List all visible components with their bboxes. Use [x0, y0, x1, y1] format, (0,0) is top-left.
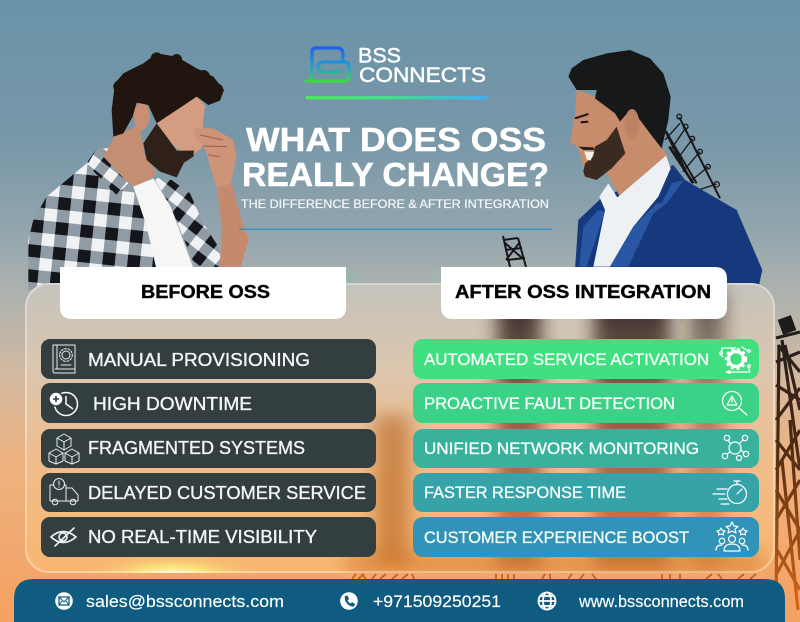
icon: phone — [340, 592, 358, 610]
icon: magnifier with warning — [722, 392, 747, 415]
icon: email — [55, 592, 73, 610]
logo wordmark: BSS — [358, 44, 401, 68]
after row 4: faster response time: FASTER RESPONSE TIME — [424, 484, 626, 502]
icon: connected nodes — [722, 435, 749, 460]
icon: people with stars — [716, 522, 748, 551]
before row 1: manual provisioning — [41, 339, 376, 379]
tab fold right — [431, 267, 445, 284]
before row 2: high downtime: HIGH DOWNTIME — [93, 394, 252, 414]
left man hand — [193, 128, 237, 188]
tower behind right man — [665, 114, 720, 198]
left man shirt right placket — [153, 177, 223, 270]
tower fragments between panel and footer — [352, 574, 756, 579]
after row 3: unified network monitoring: UNIFIED NETWORK MONITORING — [424, 440, 699, 458]
background tower behind centre — [503, 236, 526, 267]
before row 4: delayed customer service — [41, 473, 376, 512]
after row 2: proactive fault detection: PROACTIVE FAULT DETECTION — [424, 395, 675, 413]
before tab — [60, 267, 346, 319]
left man beard — [143, 123, 194, 177]
before row 1: manual provisioning: MANUAL PROVISIONING — [88, 350, 310, 370]
icon: gear network — [720, 347, 750, 373]
right man lapel left — [579, 210, 605, 267]
title: WHAT DOES OSS — [246, 121, 546, 158]
icon: globe — [538, 592, 556, 610]
title divider line — [239, 228, 552, 230]
right man beard — [583, 127, 625, 180]
after row 4: faster response time — [413, 473, 759, 512]
after row 2: proactive fault detection — [413, 383, 759, 423]
after row 1: automated service activation: AUTOMATED SERVICE ACTIVATION — [424, 351, 709, 369]
right man ear — [625, 109, 639, 139]
logo — [306, 44, 486, 87]
left man ear — [134, 102, 150, 130]
right man neck and face — [570, 90, 668, 197]
right man suit — [575, 165, 762, 288]
icon: delivery truck with alert — [50, 478, 78, 505]
panel base — [25, 283, 775, 573]
after tab — [441, 267, 727, 319]
before row 2: high downtime — [41, 383, 376, 423]
right man lapel right — [610, 180, 684, 267]
before heading: BEFORE OSS — [141, 281, 270, 302]
website: www.bssconnects.com — [578, 592, 744, 611]
left man forearm — [217, 183, 249, 267]
after row 3: unified network monitoring — [413, 429, 759, 468]
left man finger lines — [200, 135, 227, 157]
subtitle: THE DIFFERENCE BEFORE & AFTER INTEGRATION — [241, 197, 549, 211]
after heading: AFTER OSS INTEGRATION — [455, 281, 711, 302]
icon: three cubes — [49, 434, 79, 464]
logo wordmark — [358, 44, 486, 87]
left man t-shirt — [133, 178, 194, 280]
logo wordmark: CONNECTS — [359, 64, 486, 87]
panel edge — [26, 284, 774, 572]
icon: stopwatch with speed lines — [713, 481, 746, 504]
logo gradient underline — [306, 96, 487, 100]
after row 5: customer experience boost — [413, 517, 759, 557]
right man eye and brow — [575, 114, 588, 122]
left man neck — [103, 125, 157, 187]
before row 4: delayed customer service: DELAYED CUSTOMER SERVICE — [88, 483, 366, 503]
panel blurred background shapes — [87, 278, 765, 594]
left man face — [152, 97, 205, 157]
before row 5: no real-time visibility — [41, 517, 376, 557]
icon: manual book with gear — [53, 345, 75, 373]
right man hair — [568, 50, 671, 148]
footer contact bar — [14, 579, 785, 622]
title: REALLY CHANGE? — [242, 156, 549, 193]
right man moustache and smile — [578, 147, 595, 161]
icon: clock with alert — [49, 392, 78, 416]
icon: crossed eye — [51, 528, 76, 546]
panel: frosted comparison card — [25, 278, 775, 594]
after row 1: automated service activation — [413, 339, 759, 379]
left man collar — [87, 148, 128, 195]
before row 5: no real-time visibility: NO REAL-TIME VISIBILITY — [88, 527, 317, 547]
left man curly hair — [112, 52, 224, 137]
logo mark — [306, 48, 349, 81]
phone number: +971509250251 — [373, 592, 501, 611]
after row 5: customer experience boost: CUSTOMER EXPERIENCE BOOST — [424, 529, 689, 547]
background tower right — [776, 315, 800, 610]
tab fold left — [340, 267, 358, 284]
left man checked shirt — [28, 148, 157, 290]
before row 3: fragmented systems — [41, 429, 376, 468]
title — [242, 121, 549, 193]
before row 3: fragmented systems: FRAGMENTED SYSTEMS — [88, 438, 305, 458]
right man: smiling in blue suit — [568, 50, 762, 288]
email address: sales@bssconnects.com — [86, 592, 284, 611]
right man shirt — [593, 156, 671, 267]
left man: frustrated in checked shirt — [28, 52, 249, 290]
